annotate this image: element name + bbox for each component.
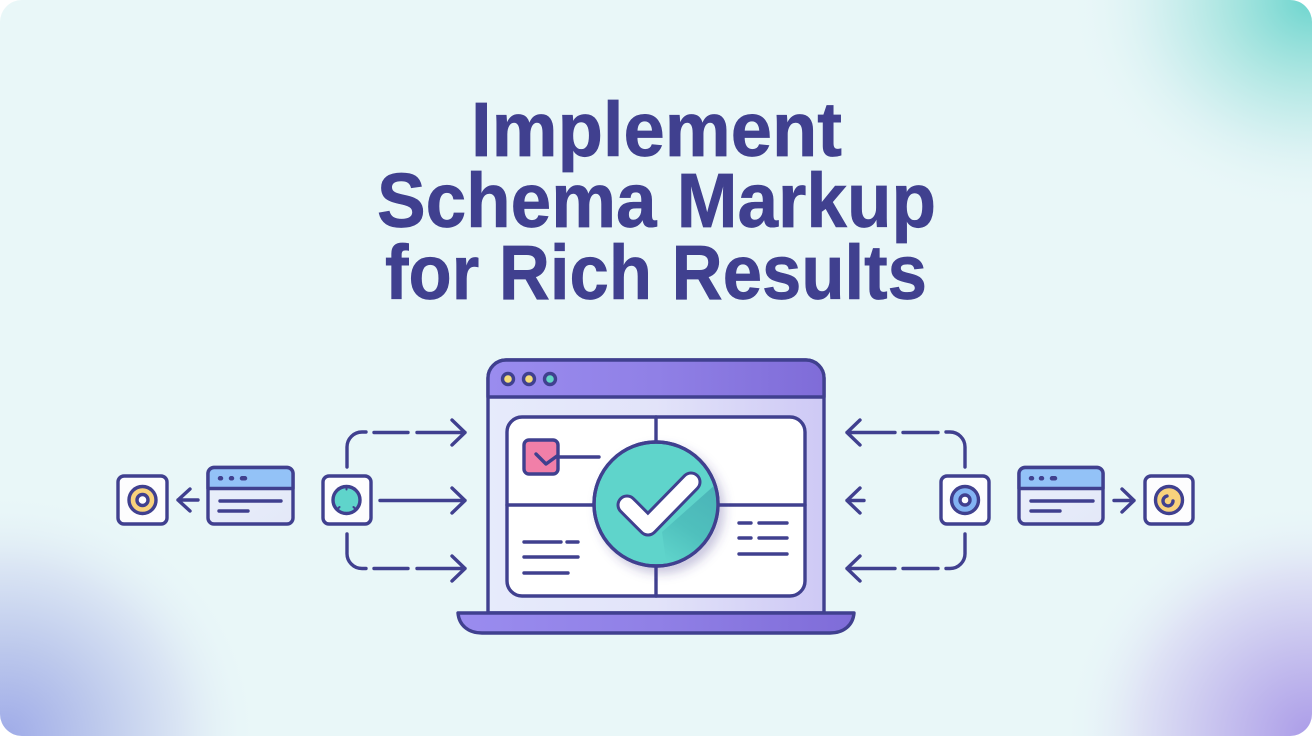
left flow [118, 420, 465, 581]
arrow to yellow tile [178, 489, 198, 511]
icon: blue ring tile [941, 476, 989, 524]
title: Schema Markup [377, 158, 936, 244]
arrow bottom right [847, 534, 965, 581]
icon: yellow ring tile [118, 476, 167, 524]
content panel [507, 417, 805, 596]
pink checkbox with line [524, 440, 599, 474]
arrow middle right [847, 488, 864, 513]
text lines left [524, 542, 578, 573]
arrow to moon tile [1114, 489, 1134, 512]
window dots [502, 374, 556, 384]
title [377, 87, 936, 316]
title: Implement [471, 87, 842, 173]
laptop base [458, 613, 854, 633]
arrow top left [347, 420, 465, 467]
right flow [847, 420, 1193, 581]
icon: yellow moon tile [1145, 476, 1193, 524]
arrow bottom left [347, 534, 465, 581]
title: for Rich Results [385, 230, 927, 316]
arrow top right [847, 420, 965, 467]
mini browser window right [1019, 468, 1103, 524]
check badge [594, 442, 730, 575]
text lines right [739, 523, 787, 554]
laptop illustration [458, 360, 854, 633]
laptop screen [488, 360, 824, 613]
arrow middle left [380, 488, 465, 513]
mini browser window left [208, 468, 293, 524]
icon: teal circle tile [323, 476, 371, 524]
browser title bar [488, 360, 824, 397]
